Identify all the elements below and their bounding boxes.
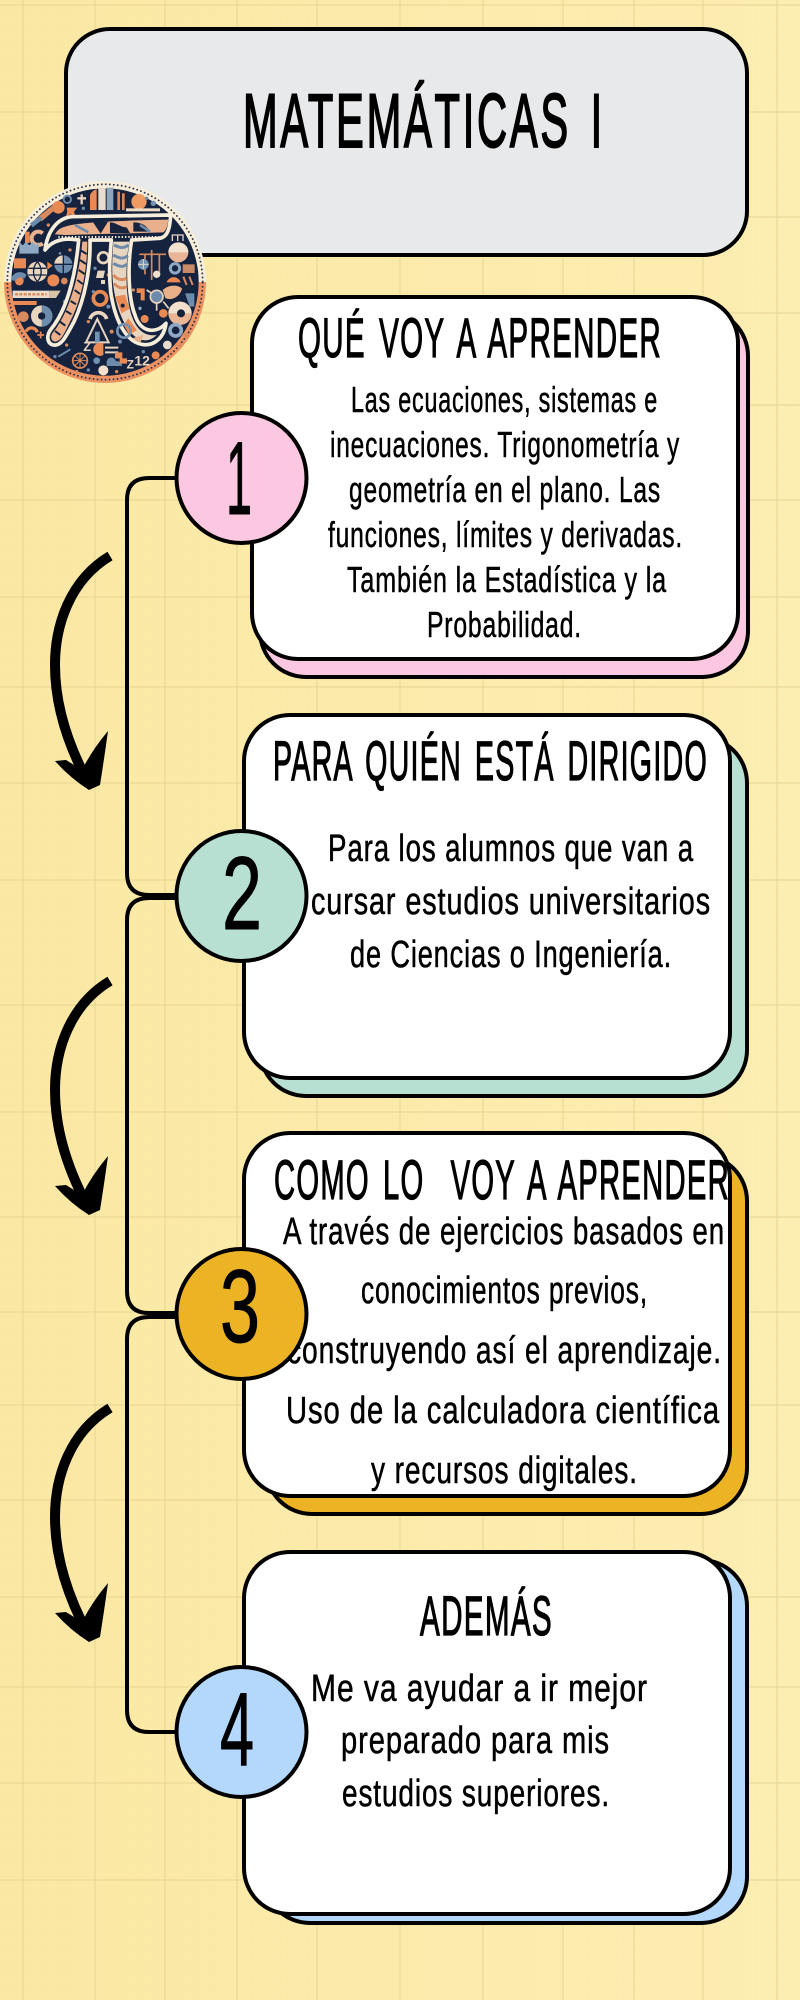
body text: Me va ayudar a ir mejor bbox=[311, 1668, 648, 1710]
medallion ornaments: 12 bbox=[134, 352, 150, 368]
number badge 3: 3 bbox=[220, 1249, 260, 1365]
connector line: 3 to 4 bbox=[127, 1317, 178, 1732]
arrow 3 bbox=[55, 1408, 110, 1642]
number badge 2 bbox=[176, 831, 306, 961]
panel: qué voy a aprender bbox=[252, 297, 748, 677]
number badge 4: 4 bbox=[220, 1672, 254, 1788]
body text bbox=[311, 1668, 648, 1815]
panel: para quién está dirigido bbox=[244, 715, 747, 1096]
number badge 4 bbox=[176, 1667, 306, 1797]
body text bbox=[283, 1211, 725, 1492]
number badge 3 bbox=[176, 1249, 306, 1379]
medallion ornaments: Z bbox=[127, 357, 134, 371]
body text: conocimientos previos, bbox=[361, 1270, 648, 1312]
medallion ornaments bbox=[11, 188, 195, 375]
arrow 1 bbox=[55, 556, 110, 790]
body text: geometría en el plano. Las bbox=[349, 469, 661, 510]
connector line: 2 to 3 bbox=[127, 898, 178, 1313]
body text: y recursos digitales. bbox=[371, 1450, 638, 1492]
body text: Probabilidad. bbox=[427, 604, 582, 645]
panel: además bbox=[244, 1552, 747, 1923]
medallion ornaments: Z bbox=[83, 340, 91, 354]
body text: estudios superiores. bbox=[342, 1773, 610, 1815]
pi symbol bbox=[45, 215, 171, 345]
body text bbox=[311, 828, 711, 976]
title panel bbox=[66, 29, 747, 255]
body text: de Ciencias o Ingeniería. bbox=[350, 934, 672, 976]
body text: También la Estadística y la bbox=[347, 559, 667, 600]
number badge 1: 1 bbox=[226, 421, 252, 537]
number badge 2: 2 bbox=[222, 836, 262, 952]
connector line: 1 to 2 bbox=[127, 478, 178, 895]
heading: ADEMÁS bbox=[420, 1584, 553, 1647]
body text: preparado para mis bbox=[341, 1720, 610, 1762]
panel: como lo voy a aprender bbox=[244, 1133, 747, 1514]
number badge 1 bbox=[176, 413, 306, 543]
icon: pi medallion bbox=[4, 181, 206, 383]
arrow 2 bbox=[55, 981, 110, 1215]
body text bbox=[328, 379, 683, 645]
